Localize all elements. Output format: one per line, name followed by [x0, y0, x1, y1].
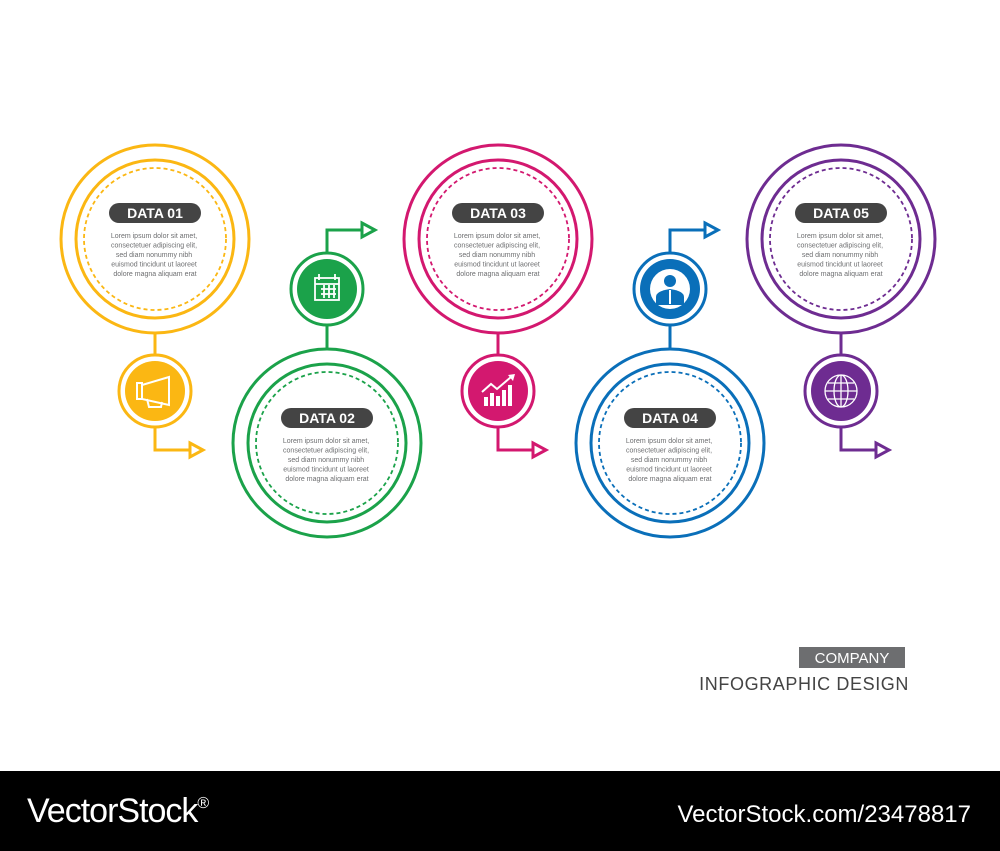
connector 1: [155, 333, 190, 450]
footer bar: ®: [197, 795, 209, 812]
company label: COMPANY: [815, 650, 889, 667]
title pill 1: [109, 203, 201, 223]
title pill 3: [452, 203, 544, 223]
connector 2: [327, 230, 362, 349]
title pill 5: [795, 203, 887, 223]
arrow 5: [876, 443, 889, 457]
step 1: yellow: [61, 145, 249, 457]
big circle 2: [233, 349, 421, 537]
arrow 2: [362, 223, 375, 237]
step 5: purple: [747, 145, 935, 457]
footer bar: VectorStock: [27, 792, 197, 830]
text 2: [283, 438, 371, 483]
footer bar: [0, 771, 1000, 851]
big circle 5: [747, 145, 935, 333]
big circle 4: [576, 349, 764, 537]
connector 4: [670, 230, 705, 349]
title pill 4: [624, 408, 716, 428]
footer bar: VectorStock.com/23478817: [677, 801, 971, 828]
text 5: [797, 233, 885, 278]
step 2: green: [233, 223, 421, 537]
step 3: magenta: [404, 145, 592, 457]
text 3: [454, 233, 542, 278]
text 1: [111, 233, 199, 278]
icon circle 4: [634, 253, 706, 325]
connector 3: [498, 333, 533, 450]
title pill 2: DATA 02: [299, 410, 355, 426]
icon circle 3: [462, 355, 534, 427]
title pill 2: [281, 408, 373, 428]
arrow 4: [705, 223, 718, 237]
big circle 1: [61, 145, 249, 333]
icon circle 5: [805, 355, 877, 427]
step 4: blue: [576, 223, 764, 537]
text 4: [626, 438, 714, 483]
title pill 4: DATA 04: [642, 410, 698, 426]
icon circle 2: [291, 253, 363, 325]
company label: [799, 647, 905, 668]
subtitle: INFOGRAPHIC DESIGN: [699, 674, 909, 694]
arrow 3: [533, 443, 546, 457]
title pill 1: DATA 01: [127, 205, 183, 221]
icon circle 1: [119, 355, 191, 427]
connector 5: [841, 333, 876, 450]
title pill 3: DATA 03: [470, 205, 526, 221]
big circle 3: [404, 145, 592, 333]
title pill 5: DATA 05: [813, 205, 869, 221]
arrow 1: [190, 443, 203, 457]
